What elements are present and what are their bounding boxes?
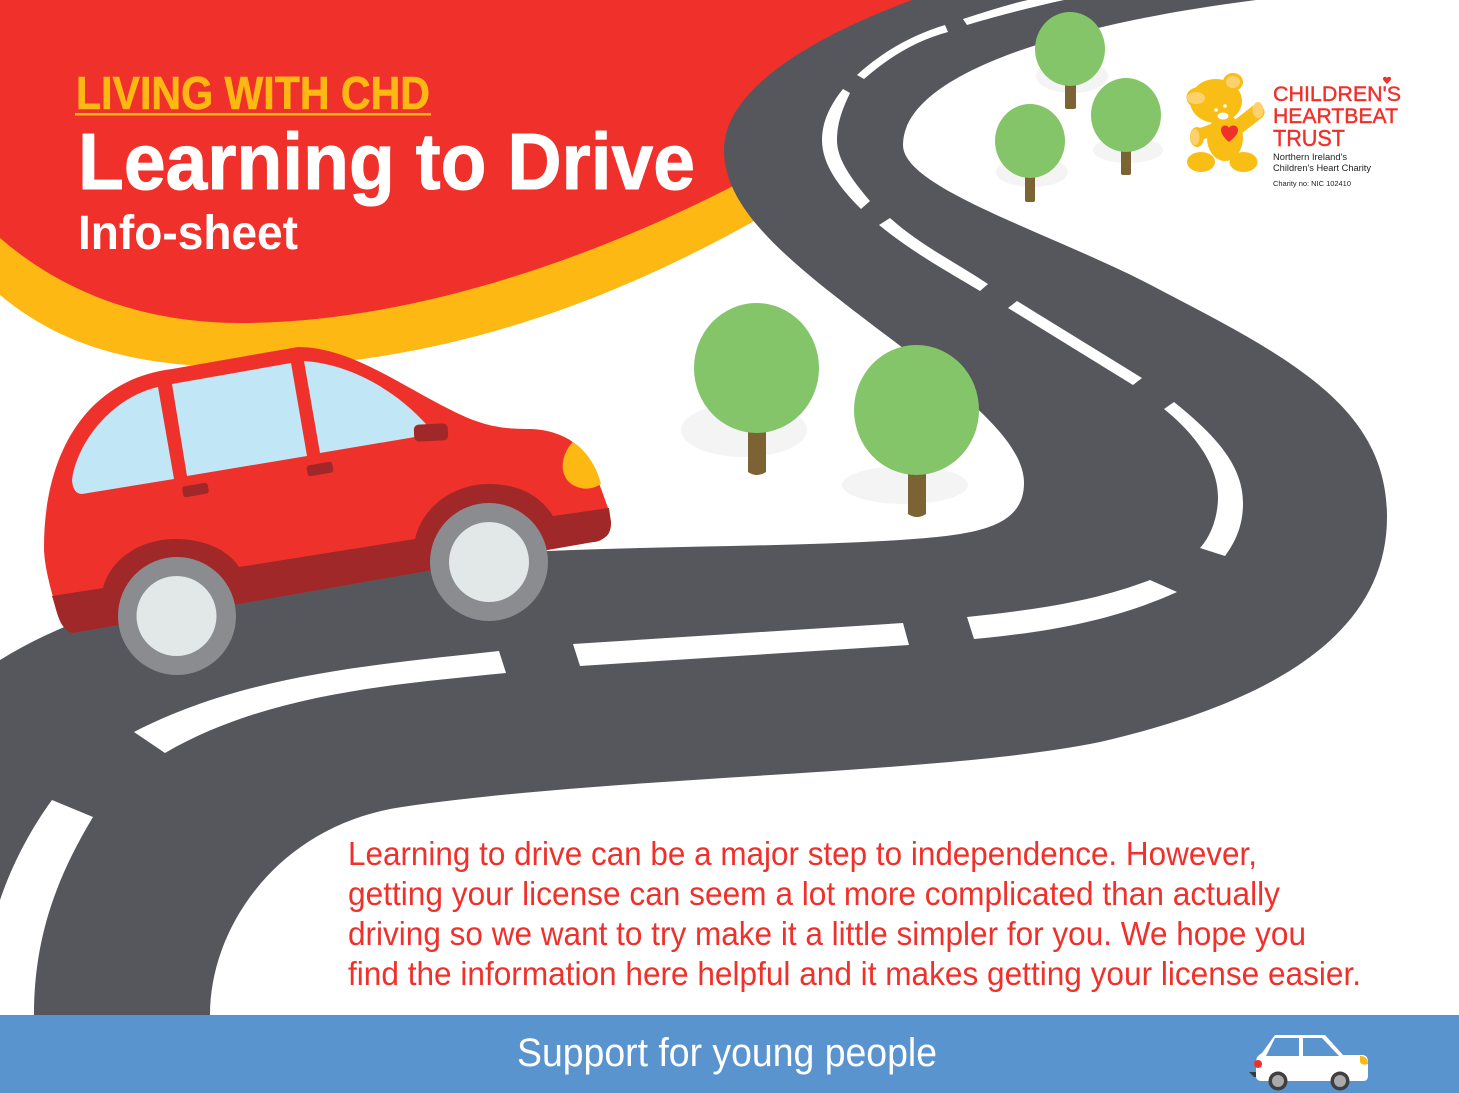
car lower band bbox=[52, 484, 611, 633]
tree: top centre bbox=[1035, 12, 1108, 109]
car front wheel bbox=[430, 503, 548, 621]
car middle window bbox=[172, 363, 307, 476]
logo: Children's Heartbeat Trust: Children's Heart Charity bbox=[1273, 163, 1371, 173]
logo wordmark: CHILDREN'S bbox=[1273, 83, 1401, 106]
yellow swoosh bbox=[0, 170, 770, 367]
footer label: Support for young people bbox=[517, 1031, 937, 1075]
logo: Children's Heartbeat Trust bbox=[1186, 73, 1401, 188]
tree: large left bbox=[681, 303, 819, 475]
logo strapline: Northern Ireland's bbox=[1273, 152, 1348, 162]
logo charity number: Charity no: NIC 102410 bbox=[1273, 179, 1351, 188]
kicker: living with CHD: LIVING WITH CHD bbox=[76, 67, 430, 119]
tree: large right bbox=[842, 345, 979, 517]
intro paragraph: find the information here helpful and it makes getting your license easier. bbox=[348, 955, 1361, 992]
car door handle front bbox=[306, 461, 334, 477]
car front window bbox=[304, 361, 426, 453]
logo bear bbox=[1186, 73, 1264, 172]
title: Learning to Drive bbox=[78, 117, 695, 206]
intro paragraph bbox=[348, 835, 1361, 992]
subtitle: Info-sheet bbox=[78, 207, 298, 260]
car headlight bbox=[563, 442, 601, 489]
car mirror bbox=[414, 423, 448, 442]
tree: top right bbox=[1091, 78, 1163, 175]
footer bar bbox=[0, 1015, 1459, 1093]
intro paragraph: getting your license can seem a lot more complicated than actually bbox=[348, 875, 1280, 912]
tree: top left bbox=[995, 104, 1068, 202]
red header panel bbox=[0, 0, 930, 323]
car door handle rear bbox=[182, 482, 209, 498]
intro paragraph: Learning to drive can be a major step to independence. However, bbox=[348, 835, 1257, 872]
logo small heart bbox=[1383, 77, 1391, 84]
car rear window bbox=[72, 387, 174, 494]
logo: Children's Heartbeat Trust: HEARTBEAT bbox=[1273, 105, 1398, 128]
logo: Children's Heartbeat Trust: TRUST bbox=[1273, 125, 1345, 151]
car body bbox=[44, 347, 611, 633]
red car bbox=[44, 347, 611, 675]
car rear wheel bbox=[118, 557, 236, 675]
intro paragraph: driving so we want to try make it a little simpler for you. We hope you bbox=[348, 915, 1306, 952]
icon: small white car bbox=[1249, 1035, 1368, 1090]
